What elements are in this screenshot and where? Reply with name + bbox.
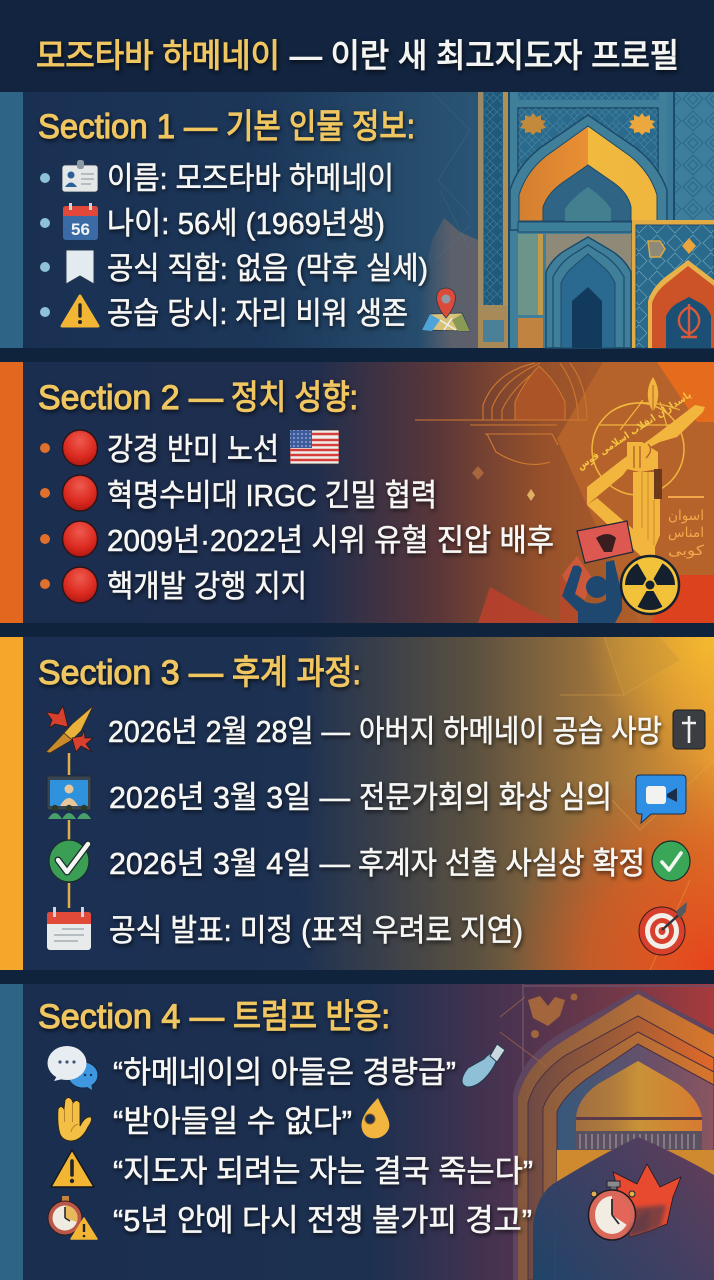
illustration: arch and blast <box>500 984 714 1280</box>
section 1 heading: 기본 인물 정보: <box>226 108 415 146</box>
section 1 background <box>0 92 714 348</box>
title bar <box>0 0 714 92</box>
icon: video bubble <box>636 775 686 823</box>
quote: lightweight <box>48 1044 505 1090</box>
icon: target <box>639 902 687 955</box>
section 1 heading <box>38 108 415 146</box>
icon: calendar 56: 56 <box>71 220 90 239</box>
list item: during strike <box>40 288 470 331</box>
quote text: “지도자 되려는 자는 결국 죽는다” <box>113 1154 533 1189</box>
icon: stopwatch and warning <box>48 1196 97 1239</box>
quote text: “5년 안에 다시 전쟁 불가피 경고” <box>113 1203 532 1238</box>
section 2 heading: Section 2 — <box>38 379 223 417</box>
timeline item: video session <box>47 775 686 823</box>
section 4 background <box>0 984 714 1280</box>
section 3 background <box>0 637 714 970</box>
item text: 2026년 3월 4일 — <box>109 846 350 881</box>
icon: red circle <box>62 475 98 511</box>
illustration: IRGC emblem and protest: کوبی <box>668 543 704 559</box>
timeline item: successor chosen <box>49 840 690 882</box>
icon: speech bubbles <box>48 1046 98 1090</box>
icon: screen audience <box>47 776 91 819</box>
timeline item: official announcement <box>47 902 687 955</box>
icon: red circle <box>62 521 98 557</box>
illustration: IRGC emblem and protest: امناس <box>668 525 704 541</box>
section 2 background <box>0 362 714 623</box>
icon: warning <box>62 296 98 326</box>
icon: green check <box>49 840 89 882</box>
quote text: “하메네이의 아들은 경량급” <box>113 1055 456 1090</box>
icon: raised hand <box>58 1098 92 1141</box>
timeline connector <box>68 753 70 908</box>
section 4 heading: Section 4 — <box>38 998 224 1036</box>
icon: red circle <box>62 430 98 466</box>
icon: id card <box>62 160 98 192</box>
item text: 공습 당시: 자리 비워 생존 <box>107 296 408 331</box>
illustration: IRGC emblem and protest: اسوان <box>668 508 704 524</box>
section 3 accent strip <box>0 637 23 970</box>
item text <box>109 846 645 881</box>
item text: 후계자 선출 사실상 확정 <box>358 846 645 881</box>
item text: 2026년 2월 28일 — <box>108 714 350 749</box>
item text: 혁명수비대 IRGC 긴밀 협력 <box>107 478 437 513</box>
section 3 heading: 후계 과정: <box>232 654 361 692</box>
title <box>36 37 679 74</box>
section 4 accent strip <box>0 984 23 1280</box>
icon: bookmark <box>66 250 94 284</box>
quote text: “받아들일 수 없다” <box>113 1104 352 1139</box>
bullet <box>40 262 50 272</box>
bullet <box>40 579 50 589</box>
illustration: mosque facade <box>419 92 714 348</box>
item text <box>108 714 662 749</box>
panel: section 4 Trump reaction <box>0 984 714 1280</box>
title band <box>0 0 714 92</box>
list item: anti-US line <box>40 430 339 467</box>
panel: section 2 political stance <box>0 362 714 623</box>
panel: section 3 succession <box>0 637 714 970</box>
icon: cross tile <box>673 710 705 749</box>
bullet <box>40 173 50 183</box>
item text: 공식 직함: 없음 (막후 실세) <box>107 251 428 286</box>
timeline item: father killed <box>46 706 705 753</box>
item text: 이름: 모즈타바 하메네이 <box>107 161 394 196</box>
item text: 2026년 3월 3일 — <box>109 780 350 815</box>
list item: crackdown <box>40 521 554 558</box>
section 2 heading: 정치 성향: <box>231 379 358 417</box>
section 3 heading <box>38 654 361 692</box>
title: 모즈타바 하메네이 <box>36 37 280 74</box>
list item: nuclear support <box>40 567 307 604</box>
section 3 heading: Section 3 — <box>38 654 223 692</box>
illustration: IRGC emblem and protest: پاسداران انقلاب اسلامی قوس <box>576 389 694 473</box>
icon: green check small <box>652 841 690 881</box>
section 1 heading: Section 1 — <box>38 108 217 146</box>
quote: unacceptable <box>58 1098 389 1141</box>
item text: 강경 반미 노선 <box>107 432 279 467</box>
icon: red circle <box>62 567 98 603</box>
panel: section 1 basic info <box>0 92 714 348</box>
section 2 accent strip <box>0 362 23 623</box>
bullet <box>40 534 50 544</box>
section 4 heading: 트럼프 반응: <box>233 998 390 1036</box>
section 4 heading <box>38 998 390 1036</box>
item text: 전문가회의 화상 심의 <box>359 780 612 815</box>
icon: ok hand <box>361 1098 389 1138</box>
title: — 이란 새 최고지도자 프로필 <box>290 37 679 74</box>
icon: calendar 56 <box>63 203 98 240</box>
item text: 나이: 56세 (1969년생) <box>107 206 385 241</box>
illustration: IRGC emblem and protest <box>415 362 714 623</box>
icon: missile and blasts <box>46 706 93 753</box>
item text: 공식 발표: 미정 (표적 우려로 지연) <box>109 913 523 948</box>
bullet <box>40 443 50 453</box>
bullet <box>40 307 50 317</box>
icon: calendar note <box>47 907 91 950</box>
list item: official post <box>40 250 428 286</box>
icon: stopwatch with explosion <box>588 1164 681 1240</box>
item text <box>109 780 612 815</box>
item text: 아버지 하메네이 공습 사망 <box>359 714 662 749</box>
section 1 accent strip <box>0 92 23 348</box>
item text: 2009년·2022년 시위 유혈 진압 배후 <box>107 523 554 558</box>
bullet <box>40 218 50 228</box>
icon: map pin <box>422 288 470 331</box>
quote: would-be leader <box>51 1150 533 1189</box>
item text: 핵개발 강행 지지 <box>107 569 307 604</box>
list item: name <box>40 160 394 196</box>
icon: bomb <box>462 1044 505 1087</box>
section 2 heading <box>38 379 358 417</box>
list item: IRGC ties <box>40 475 437 513</box>
icon: US flag <box>290 430 339 464</box>
bullet <box>40 488 50 498</box>
quote: war warning <box>48 1164 681 1240</box>
list item: age <box>40 203 385 241</box>
icon: warning <box>51 1150 94 1187</box>
